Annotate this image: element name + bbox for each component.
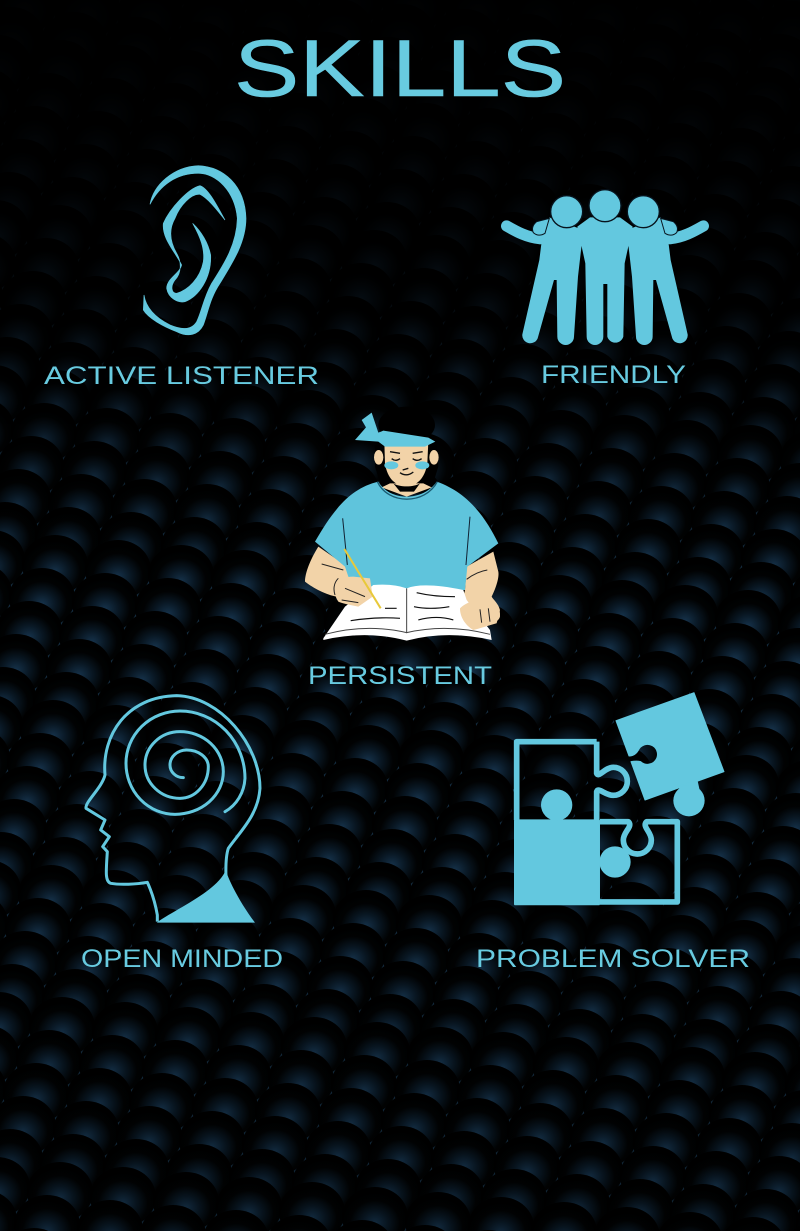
icon: head with spiral — [86, 696, 260, 923]
title: SKILLS — [234, 24, 566, 114]
label: problem solver: PROBLEM SOLVER — [476, 945, 750, 973]
label: open minded: OPEN MINDED — [81, 945, 283, 973]
label: active listener: ACTIVE LISTENER — [44, 362, 319, 390]
panel: persistent — [305, 407, 500, 690]
icon: ear — [143, 166, 246, 335]
icon: puzzle pieces — [514, 693, 724, 905]
icon: three friends — [507, 190, 703, 345]
panel: active listener — [44, 166, 319, 390]
label: friendly: FRIENDLY — [541, 361, 686, 389]
label: persistent: PERSISTENT — [308, 662, 492, 690]
panel: problem solver — [476, 693, 750, 973]
illustration: student writing in a book — [305, 407, 500, 641]
panel: open minded — [81, 696, 283, 973]
panel: friendly — [507, 190, 703, 389]
